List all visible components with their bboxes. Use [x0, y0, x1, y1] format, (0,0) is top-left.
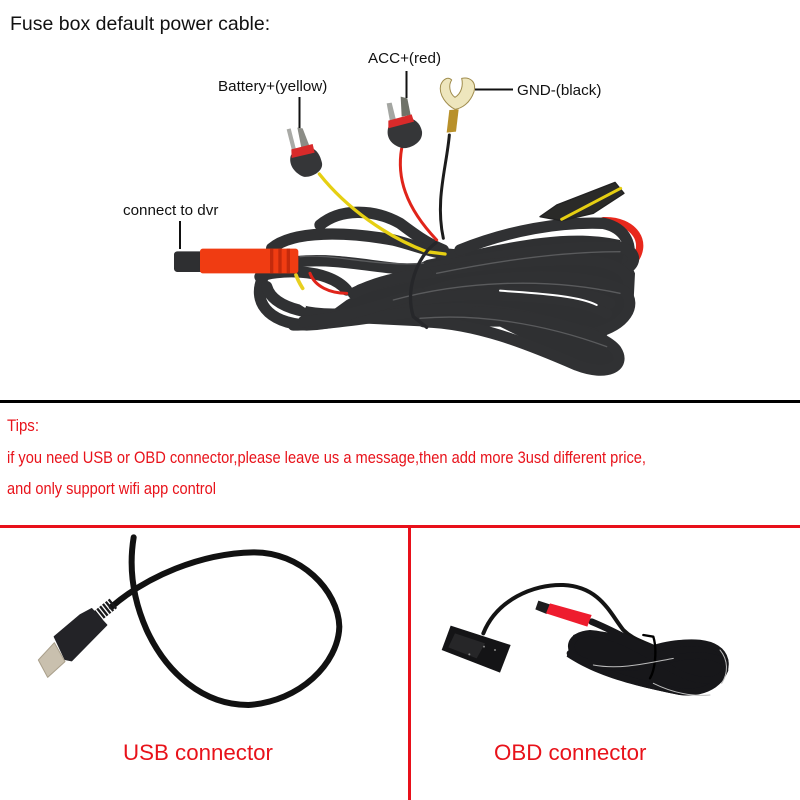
zip tie [411, 243, 436, 327]
label: connect to dvr: connect to dvr [123, 202, 218, 219]
tips text [7, 416, 646, 498]
photo: USB cable [38, 537, 339, 705]
USB metal tip [38, 643, 65, 677]
cable coil [570, 622, 725, 692]
main connector to dvr [174, 249, 298, 273]
tips text: and only support wifi app control [7, 479, 216, 498]
red wire loop behind bundle [603, 221, 640, 265]
USB connector label: USB connector [123, 740, 274, 765]
photo: fuse box power cable [174, 78, 640, 372]
cable highlights [300, 252, 620, 347]
label: ACC+(red): ACC+(red) [368, 50, 441, 67]
bundled cable coils [259, 212, 633, 370]
red connector [535, 601, 592, 627]
red dividers [0, 525, 800, 800]
dark fill of the coil bundle [310, 236, 635, 372]
title: Fuse box default power cable: [10, 13, 270, 35]
label: GND-(black) [475, 82, 601, 99]
OBD plug [442, 626, 511, 673]
USB cable loop [112, 537, 339, 705]
label: connect to dvr [123, 202, 218, 249]
label: Battery+(yellow) [218, 78, 327, 128]
coil highlights [593, 650, 726, 695]
white gaps [285, 254, 597, 307]
dark fill of the coil [567, 631, 729, 695]
red wire [400, 148, 437, 240]
USB strain relief [97, 603, 113, 617]
tips text: if you need USB or OBD connector,please leave us a message,then add more 3usd different price, [7, 448, 646, 467]
OBD cable [483, 585, 653, 647]
OBD connector label: OBD connector [494, 740, 647, 765]
wires inside the left coil [296, 275, 303, 288]
red fuse tap [387, 97, 422, 148]
black divider [0, 400, 800, 403]
yellow wire [319, 174, 445, 254]
label: GND-(black): GND-(black) [517, 82, 601, 99]
coil tie [643, 635, 655, 678]
label: ACC+(red) [368, 50, 441, 98]
label: Battery+(yellow): Battery+(yellow) [218, 78, 327, 95]
USB plug body [54, 609, 107, 661]
tips text: Tips: [7, 416, 39, 435]
yellow fuse tap [287, 128, 322, 177]
photo: OBD cable [442, 585, 729, 695]
ring terminal ground [440, 78, 475, 133]
fuse tap terminal with yellow wire [540, 182, 624, 221]
black wire [440, 135, 449, 238]
